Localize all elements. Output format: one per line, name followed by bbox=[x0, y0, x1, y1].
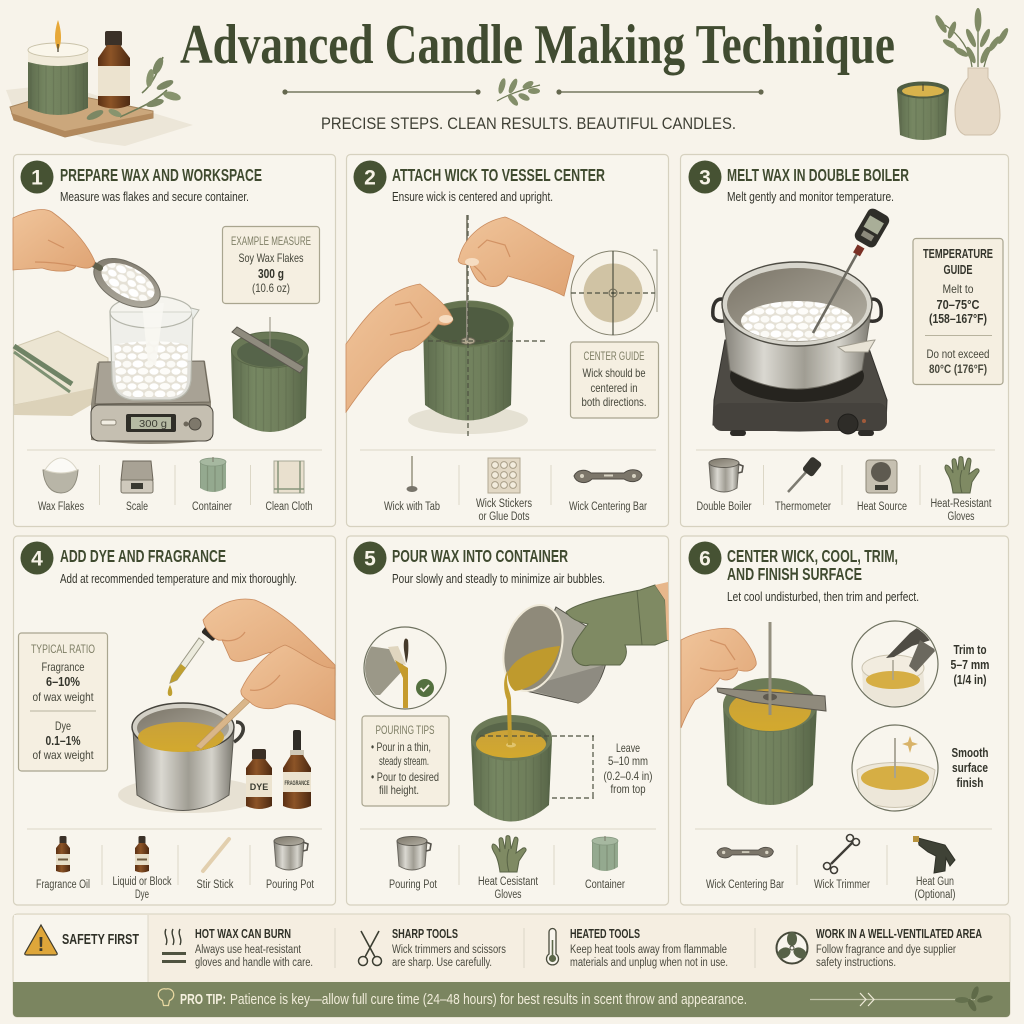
inset: smooth surface bbox=[852, 725, 938, 811]
tool: wick with tab: Wick with Tab bbox=[384, 501, 440, 513]
tool: gloves bbox=[478, 836, 539, 901]
callout: pouring tips: POURING TIPS bbox=[376, 725, 435, 737]
tool: double boiler: Double Boiler bbox=[696, 501, 752, 513]
step number 6: 6 bbox=[699, 548, 711, 570]
header bbox=[6, 8, 1010, 146]
tool: clean cloth bbox=[266, 461, 312, 513]
instruction: Melt gently and monitor temperature. bbox=[727, 190, 894, 204]
bottle: fragrance: FRAGRANCE bbox=[284, 780, 310, 787]
callout: pouring tips: steady stream. bbox=[379, 754, 429, 768]
step number 5: 5 bbox=[364, 548, 376, 570]
tool: scale bbox=[121, 461, 153, 513]
step number 5 bbox=[354, 542, 386, 574]
heading: PREPARE WAX AND WORKSPACE bbox=[60, 165, 262, 185]
fill height note bbox=[604, 741, 653, 796]
fill height note: (0.2–0.4 in) bbox=[604, 769, 653, 783]
inset: trim wick bbox=[852, 621, 938, 710]
callout: example measure bbox=[222, 226, 320, 304]
tool: liquid or block dye: Dye bbox=[135, 889, 149, 901]
callout: center guide: Wick should be bbox=[582, 366, 646, 380]
callout: pouring tips bbox=[362, 716, 449, 806]
safety: heated tools: HEATED TOOLS bbox=[570, 927, 640, 941]
callout: pouring tips: • Pour in a thin, bbox=[371, 740, 431, 754]
tool: double boiler bbox=[696, 458, 752, 513]
hand holding vessel rim bbox=[346, 284, 453, 412]
tool: wick stickers: or Glue Dots bbox=[478, 511, 530, 523]
step number 2: 2 bbox=[364, 166, 376, 190]
tool: heat gun: (Optional) bbox=[914, 889, 956, 901]
callout: example measure: (10.6 oz) bbox=[252, 281, 290, 295]
steel pot with flakes bbox=[713, 262, 881, 389]
tool: stir stick bbox=[196, 839, 234, 891]
tool: wick with tab bbox=[384, 456, 440, 513]
container with centering bar bbox=[231, 317, 308, 432]
callout: example measure: EXAMPLE MEASURE bbox=[231, 236, 311, 248]
callout: typical ratio: Fragrance bbox=[42, 660, 85, 674]
title divider with sprig bbox=[282, 77, 764, 107]
finish note: Smooth bbox=[952, 746, 988, 760]
callout: typical ratio bbox=[18, 633, 108, 771]
safety: heated tools: materials and unplug when not in use. bbox=[570, 957, 728, 969]
tool: wick trimmer bbox=[814, 834, 870, 891]
callout: temperature guide: Do not exceed bbox=[926, 347, 990, 361]
tool: heat source: Heat Source bbox=[857, 501, 907, 513]
thermometer bbox=[813, 206, 891, 333]
tool: gloves: Gloves bbox=[494, 889, 522, 901]
inset: thin stream bbox=[362, 627, 446, 712]
heading: ATTACH WICK TO VESSEL CENTER bbox=[392, 165, 605, 185]
tool: stir stick: Stir Stick bbox=[196, 879, 234, 891]
instruction: Let cool undisturbed, then trim and perfect. bbox=[727, 590, 919, 604]
callout: center guide: centered in bbox=[590, 381, 638, 395]
callout: typical ratio: of wax weight bbox=[32, 748, 94, 762]
panel 4: add dye and fragrance bbox=[14, 536, 336, 905]
tool: wick centering bar bbox=[706, 847, 784, 891]
tool: scale: Scale bbox=[126, 501, 148, 513]
panel 5: pour wax bbox=[346, 536, 669, 905]
callout: typical ratio: 0.1–1% bbox=[46, 734, 80, 748]
step number 1: 1 bbox=[31, 166, 43, 190]
tool: container bbox=[192, 457, 232, 513]
heading bbox=[727, 546, 898, 584]
trim note bbox=[950, 643, 990, 687]
tool: fragrance oil bbox=[36, 836, 90, 891]
tool: liquid or block dye: Liquid or Block bbox=[112, 876, 172, 888]
callout: typical ratio: Dye bbox=[55, 719, 71, 733]
step number 2 bbox=[354, 160, 386, 194]
step number 6 bbox=[688, 542, 722, 574]
safety: ventilation: Follow fragrance and dye supplier bbox=[816, 944, 956, 956]
tool: wick centering bar: Wick Centering Bar bbox=[569, 501, 647, 513]
step number 4: 4 bbox=[31, 548, 43, 570]
tool: heat gun bbox=[913, 836, 956, 901]
pro tip bar bbox=[13, 982, 1010, 1017]
safety: hot wax: HOT WAX CAN BURN bbox=[195, 927, 291, 941]
callout: center guide bbox=[570, 342, 658, 418]
callout: temperature guide: TEMPERATURE bbox=[923, 247, 993, 261]
candle with wick bar bbox=[717, 622, 826, 805]
instruction: Pour slowly and steadly to minimize air bubbles. bbox=[392, 572, 605, 586]
safety: sharp tools: SHARP TOOLS bbox=[392, 927, 458, 941]
pouring pot with stream bbox=[494, 598, 608, 745]
safety first badge bbox=[25, 925, 139, 956]
decoration: candle and vase bbox=[897, 8, 1010, 140]
safety: hot wax bbox=[162, 927, 313, 969]
trim note: (1/4 in) bbox=[954, 673, 986, 687]
safety: heated tools: Keep heat tools away from flammable bbox=[570, 944, 727, 956]
instruction: Add at recommended temperature and mix thoroughly. bbox=[60, 572, 297, 586]
finish note: surface bbox=[952, 761, 988, 775]
tool: clean cloth: Clean Cloth bbox=[266, 501, 312, 513]
fluted vessel with centering guides bbox=[408, 215, 548, 436]
panel 3: melt wax bbox=[680, 154, 1008, 526]
scale: 300 g bbox=[139, 419, 167, 430]
heading: MELT WAX IN DOUBLE BOILER bbox=[727, 165, 909, 185]
tool: pouring pot: Pouring Pot bbox=[266, 879, 315, 891]
hot plate bbox=[713, 340, 887, 436]
tool: container: Container bbox=[192, 501, 232, 513]
callout: typical ratio: 6–10% bbox=[46, 675, 80, 689]
tool: wick stickers bbox=[476, 458, 532, 523]
fill height note: Leave bbox=[616, 741, 640, 755]
fill height dimension bbox=[480, 736, 594, 798]
center guide diagram bbox=[571, 250, 657, 335]
pot with melted wax and stir stick bbox=[118, 668, 281, 813]
fill height note: 5–10 mm bbox=[608, 754, 648, 768]
tool: gloves: Heat-Resistant bbox=[930, 498, 992, 510]
trim note: Trim to bbox=[954, 643, 987, 657]
bottle: dye bbox=[246, 749, 272, 809]
panel 6: center, trim and finish bbox=[680, 536, 1008, 905]
safety band bbox=[13, 914, 1010, 1017]
tool: wax flakes bbox=[38, 458, 84, 513]
tool: gloves bbox=[930, 457, 992, 523]
heading: ADD DYE AND FRAGRANCE bbox=[60, 546, 226, 566]
bottle: fragrance bbox=[283, 730, 311, 809]
pro tip bar: Patience is key—allow full cure time (24–48 hours) for best results in scent throw and appearance. bbox=[230, 992, 747, 1008]
step number 1 bbox=[20, 160, 54, 194]
heading: AND FINISH SURFACE bbox=[727, 564, 862, 584]
tool: container: Container bbox=[585, 879, 625, 891]
cloth bbox=[14, 331, 108, 416]
tool: pouring pot bbox=[389, 836, 438, 891]
safety: sharp tools bbox=[358, 927, 506, 969]
beaker with flakes bbox=[110, 296, 199, 400]
callout: typical ratio: of wax weight bbox=[32, 690, 94, 704]
hands with dropper and stick bbox=[203, 599, 335, 720]
callout: center guide: both directions. bbox=[582, 395, 646, 409]
safety first badge: SAFETY FIRST bbox=[62, 931, 139, 948]
finish note bbox=[952, 746, 988, 790]
callout: pouring tips: • Pour to desired bbox=[371, 770, 439, 784]
safety: sharp tools: are sharp. Use carefully. bbox=[392, 957, 492, 969]
safety: sharp tools: Wick trimmers and scissors bbox=[392, 944, 506, 956]
trim note: 5–7 mm bbox=[950, 658, 990, 672]
safety: hot wax: Always use heat-resistant bbox=[195, 944, 302, 956]
dropper bbox=[168, 612, 229, 696]
tool: pouring pot bbox=[266, 836, 315, 891]
tool: gloves: Gloves bbox=[948, 511, 975, 523]
tool: wick stickers: Wick Stickers bbox=[476, 498, 532, 510]
callout: example measure: Soy Wax Flakes bbox=[238, 251, 304, 265]
tagline: PRECISE STEPS. CLEAN RESULTS. BEAUTIFUL CANDLES. bbox=[321, 114, 736, 133]
tool: wick trimmer: Wick Trimmer bbox=[814, 879, 870, 891]
hand holding bar bbox=[681, 628, 756, 728]
safety: hot wax: gloves and handle with care. bbox=[195, 957, 313, 969]
safety: ventilation bbox=[775, 927, 982, 969]
gloved hand bbox=[566, 582, 669, 666]
callout: center guide: CENTER GUIDE bbox=[584, 351, 645, 363]
callout: temperature guide: 70–75°C bbox=[936, 298, 980, 312]
tool: gloves: Heat Cesistant bbox=[478, 876, 539, 888]
callout: temperature guide: GUIDE bbox=[944, 263, 972, 277]
callout: pouring tips: fill height. bbox=[379, 783, 419, 797]
safety: ventilation: safety instructions. bbox=[816, 957, 896, 969]
heading: POUR WAX INTO CONTAINER bbox=[392, 546, 568, 566]
callout: temperature guide: 80°C (176°F) bbox=[929, 362, 987, 376]
step number 4 bbox=[20, 542, 54, 574]
fill height note: from top bbox=[610, 782, 646, 796]
instruction: Ensure wick is centered and upright. bbox=[392, 190, 553, 204]
callout: temperature guide: Melt to bbox=[942, 282, 974, 296]
step number 3: 3 bbox=[699, 166, 711, 190]
tool: pouring pot: Pouring Pot bbox=[389, 879, 438, 891]
callout: temperature guide bbox=[913, 238, 1003, 384]
tool: heat gun: Heat Gun bbox=[916, 876, 954, 888]
tool: thermometer bbox=[775, 456, 831, 513]
tool: wick centering bar bbox=[569, 470, 647, 513]
finish note: finish bbox=[956, 776, 984, 790]
tool: thermometer: Thermometer bbox=[775, 501, 831, 513]
instruction: Measure was flakes and secure container. bbox=[60, 190, 249, 204]
hand holding wick bbox=[458, 217, 574, 296]
panel 1: prepare wax and workspace bbox=[13, 154, 336, 526]
decoration: candle, bottle and sprig on board bbox=[6, 20, 193, 146]
callout: temperature guide: (158–167°F) bbox=[929, 312, 987, 326]
scale bbox=[91, 361, 213, 444]
safety first badge: ! bbox=[38, 934, 44, 956]
callout: typical ratio: TYPICAL RATIO bbox=[31, 644, 95, 656]
tool: wick centering bar: Wick Centering Bar bbox=[706, 879, 784, 891]
hand holding scoop bbox=[13, 210, 168, 318]
tool: container bbox=[585, 836, 625, 891]
tool: wax flakes: Wax Flakes bbox=[38, 501, 84, 513]
tool: heat source bbox=[857, 460, 907, 513]
step number 3 bbox=[688, 160, 722, 194]
bottle: dye: DYE bbox=[250, 782, 268, 792]
tool: fragrance oil: Fragrance Oil bbox=[36, 879, 90, 891]
heading: CENTER WICK, COOL, TRIM, bbox=[727, 546, 898, 566]
callout: example measure: 300 g bbox=[258, 267, 284, 281]
pro tip bar: PRO TIP: bbox=[180, 992, 226, 1008]
panel 2: attach wick bbox=[346, 154, 668, 526]
tool: liquid or block dye bbox=[112, 836, 172, 901]
fluted container with wax bbox=[471, 715, 552, 822]
safety: heated tools bbox=[546, 927, 728, 969]
